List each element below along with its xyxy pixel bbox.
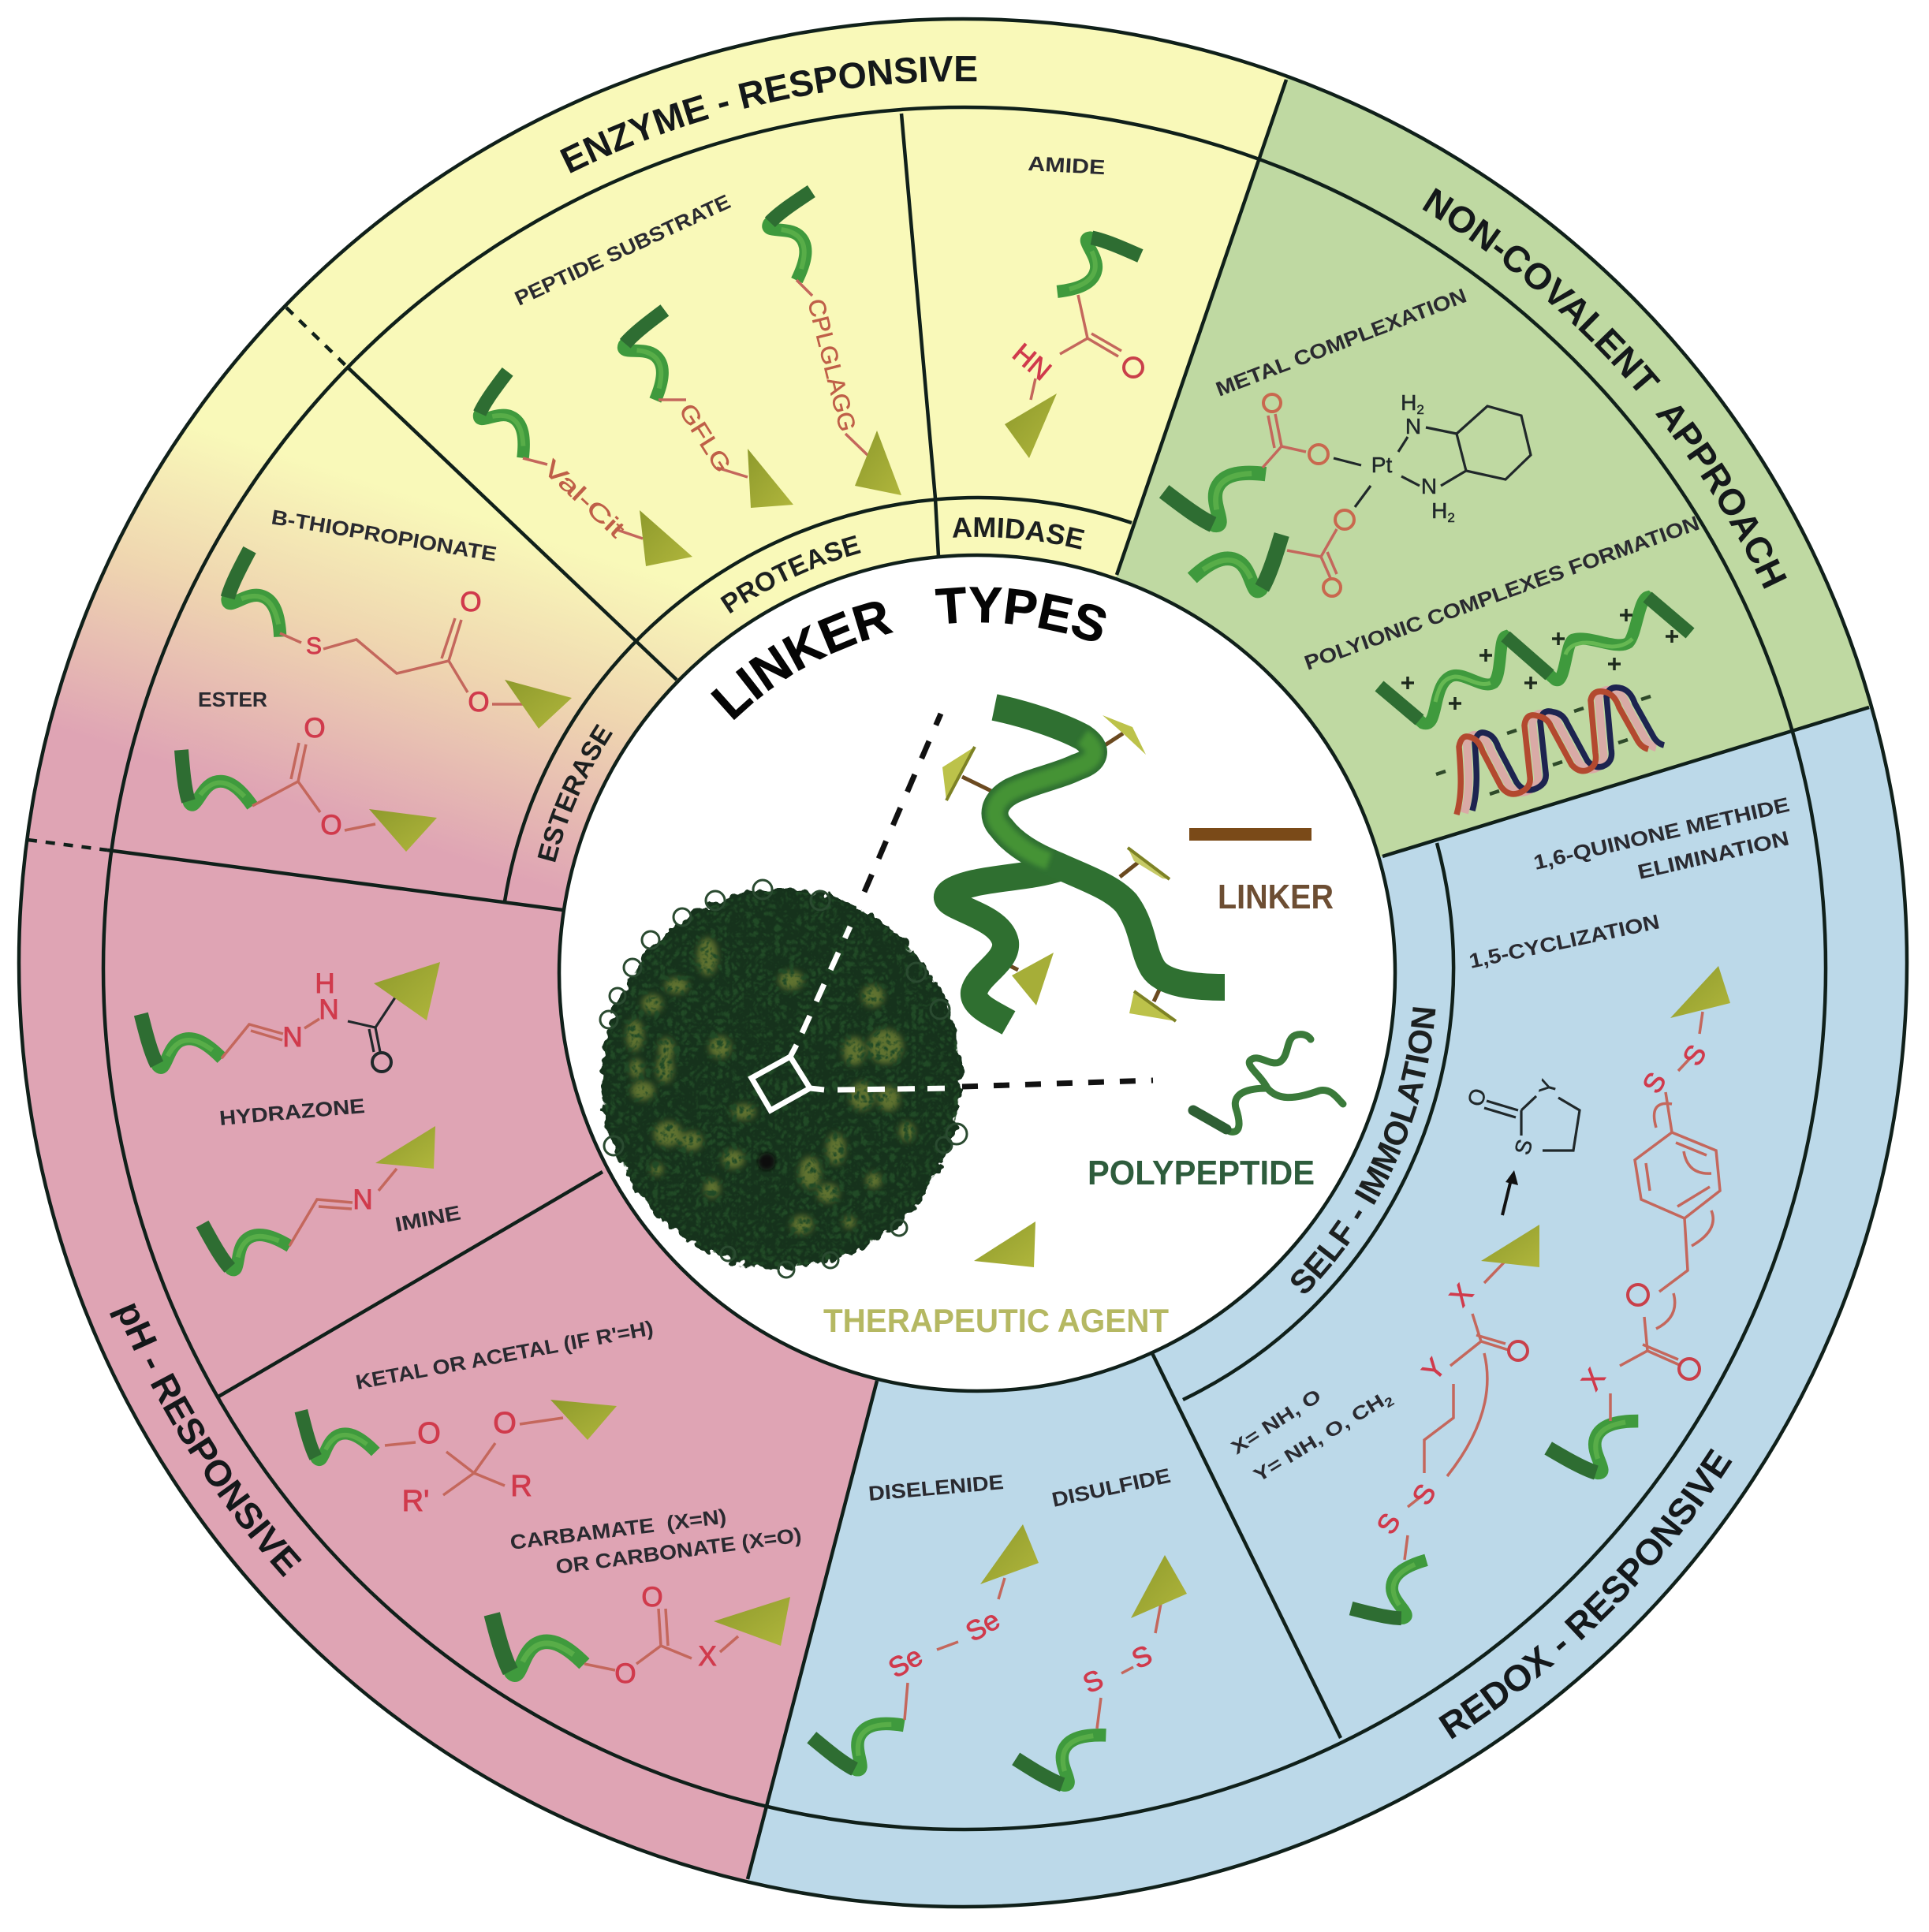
- structure: platinum diaminocyclohexane: [1334, 390, 1531, 525]
- label: carbamate or carbonate: [509, 1505, 803, 1579]
- panel: enzyme-responsive to pH-responsive background: [0, 0, 1313, 1932]
- icon: polymer chain: [1548, 1388, 1638, 1482]
- structure: disulfide: S: [1078, 1664, 1108, 1699]
- label: 1,5-cyclization: 1,5-CYCLIZATION: [1467, 909, 1662, 973]
- icon: therapeutic agent triangle: [980, 1524, 1039, 1584]
- icon: polymer chain val-cit: [472, 371, 559, 458]
- title: linker types: [711, 587, 1106, 721]
- structure: 1,6-elimination: S: [1636, 1067, 1673, 1098]
- icon: polymer chain: [141, 1002, 222, 1070]
- icon: DNA helix: [1457, 688, 1664, 815]
- structure: diselenide: Se: [961, 1604, 1006, 1648]
- panel: nanoparticle: [600, 714, 1153, 1277]
- label: X and Y definitions: 2: [1382, 1395, 1397, 1411]
- structure: ester: [252, 713, 375, 841]
- structure: ester: O: [304, 713, 326, 744]
- structure: disulfide: S: [1127, 1639, 1157, 1675]
- arrow: release: [1502, 1170, 1518, 1215]
- nanoparticle drug patches: [626, 938, 915, 1234]
- label: peptide substrate: PEPTIDE SUBSTRATE: [511, 189, 734, 310]
- icon: therapeutic agent triangle: [855, 431, 901, 495]
- panel: non-covalent approach background: [1116, 78, 1870, 856]
- icon: polymer chain 2: [1192, 518, 1282, 595]
- panel: centre white circle: [559, 555, 1395, 1391]
- structure: ketal: R': [402, 1485, 429, 1518]
- structure: gflg linker: GFLG: [673, 399, 736, 477]
- structure: ketal: [385, 1407, 563, 1518]
- icon: therapeutic agent triangle: [374, 962, 440, 1020]
- structure: platinum diaminocyclohexane: 2: [1416, 402, 1424, 417]
- icon: therapeutic agent triangle: [974, 1221, 1035, 1267]
- structure: cyclic thiolactone: [1463, 1076, 1580, 1158]
- heading: pH-responsive: pH - RESPONSIVE: [110, 1303, 302, 1577]
- panel: hydrazone and imine: [141, 962, 463, 1275]
- structure: platinum diaminocyclohexane: H: [1401, 390, 1416, 415]
- icon: therapeutic agent triangle: [505, 680, 572, 729]
- label: polyionic complexes formation: POLYIONIC COMPLEXES FORMATION: [1301, 511, 1703, 675]
- structure: diselenide: [883, 1578, 1006, 1720]
- structure: 1,5-cyclization: Y: [1416, 1352, 1452, 1386]
- structure: platinum carboxylate ligands: [1263, 394, 1354, 596]
- icon: therapeutic agent triangle: [640, 510, 692, 566]
- icon: polymer chain: [1058, 229, 1140, 319]
- label: therapeutic agent: THERAPEUTIC AGENT: [823, 1302, 1169, 1339]
- structure: carbamate: X: [698, 1641, 717, 1672]
- structure: diselenide: Se: [883, 1640, 928, 1684]
- structure: 1,6-elimination: [1576, 1012, 1720, 1421]
- structure: platinum diaminocyclohexane: N: [1421, 474, 1437, 498]
- label: ketal or acetal: KETAL OR ACETAL (IF R'=H): [354, 1316, 655, 1394]
- structure: ketal: O: [493, 1407, 517, 1440]
- structure: thiopropionate: S: [306, 633, 322, 659]
- title: linker types: LINKER: [711, 602, 894, 721]
- heading: non-covalent approach: NON-COVALENT APPROACH: [1423, 188, 1787, 589]
- structure: thiopropionate: O: [460, 587, 482, 617]
- icon: therapeutic agent triangle: [714, 1597, 790, 1646]
- label: polypeptide: POLYPEPTIDE: [1088, 1154, 1315, 1192]
- polypeptide main chain: [994, 707, 1225, 987]
- structure: 1,6-elimination: X: [1576, 1363, 1611, 1396]
- structure: cyclic thiolactone: Y: [1534, 1076, 1561, 1098]
- structure: hydrazone: N: [282, 1022, 303, 1053]
- label: X and Y definitions: Y= NH, O, CH: [1250, 1406, 1363, 1486]
- structure: carbamate: [584, 1582, 738, 1689]
- structure: 1,5-cyclization: S: [1371, 1508, 1407, 1539]
- sub-heading: self-immolation: SELF - IMMOLATION: [1291, 1007, 1435, 1293]
- sub-heading: protease: PROTEASE: [720, 535, 861, 614]
- label: metal complexation: METAL COMPLEXATION: [1212, 283, 1470, 401]
- label: beta-thiopropionate: B-THIOPROPIONATE: [270, 505, 498, 566]
- structure: disulfide: [1078, 1599, 1162, 1729]
- structure: val-cit linker: [523, 455, 643, 543]
- icon: therapeutic agent triangle: [550, 1400, 617, 1440]
- label: diselenide: DISELENIDE: [867, 1470, 1005, 1505]
- icon: polymer chain: [203, 1195, 290, 1275]
- linker sticks: [962, 733, 1160, 1001]
- structure: cplglagg linker: [797, 280, 867, 455]
- heading: redox-responsive: REDOX - RESPONSIVE: [1438, 1448, 1732, 1740]
- icon: polymer chain: [1016, 1700, 1106, 1793]
- sub-heading: amidase: AMIDASE: [953, 517, 1085, 550]
- label: 1,6-quinone methide elimination: 1,6-QUINONE METHIDE: [1532, 793, 1792, 875]
- polypeptide highlight: [994, 737, 1094, 861]
- label: X and Y definitions: [1228, 1386, 1397, 1489]
- icon: polymer chain: [219, 550, 311, 636]
- icon: therapeutic agent triangle: [1131, 1555, 1187, 1618]
- icon: positive charges: [1401, 609, 1678, 710]
- icon: therapeutic agent triangle: [375, 1126, 435, 1169]
- structure: thiopropionate: O: [468, 687, 490, 718]
- structure: platinum diaminocyclohexane: H: [1431, 498, 1447, 523]
- icon: polymer chain: [492, 1600, 584, 1678]
- icon: therapeutic agent triangle: [1481, 1225, 1539, 1267]
- magnified square marker: [752, 1057, 810, 1110]
- sub-heading: esterase: ESTERASE: [538, 724, 613, 863]
- structure: amide bond: HN: [1006, 338, 1057, 386]
- panel: amide: [1005, 151, 1143, 458]
- icon: therapeutic agent triangle: [1670, 966, 1730, 1018]
- label: carbamate or carbonate: CARBAMATE (X=N): [509, 1505, 728, 1554]
- nanoparticle edge loops: [600, 880, 967, 1277]
- panel: redox-responsive background: [734, 689, 1929, 1932]
- icon: polymer chain: [181, 750, 252, 806]
- structure: 1,5-cyclization: [1371, 1261, 1528, 1560]
- panel: esterase structures: [181, 505, 572, 852]
- icon: therapeutic agent triangle: [1005, 393, 1057, 458]
- structure: cyclic thiolactone: O: [1463, 1086, 1491, 1109]
- structure: ketal: R: [510, 1470, 532, 1503]
- structure: 1,6-elimination: S: [1677, 1039, 1713, 1071]
- structure: platinum diaminocyclohexane: N: [1405, 414, 1421, 438]
- structure: carbamate: O: [641, 1582, 663, 1613]
- icon: polymer chain: [812, 1685, 904, 1777]
- structure: platinum diaminocyclohexane: 2: [1447, 510, 1455, 525]
- nanoparticle strand texture: [603, 891, 960, 1266]
- structure: cyclic thiolactone: S: [1509, 1137, 1537, 1158]
- zoom line to polypeptide: [810, 1080, 1153, 1090]
- structure: hydrazone: [222, 968, 400, 1072]
- structure: ester: O: [320, 810, 342, 841]
- structure: 1,5-cyclization: X: [1444, 1278, 1479, 1312]
- icon: large polypeptide with linkers and agents: [942, 707, 1225, 1023]
- polypeptide branch: [947, 867, 1061, 1023]
- icon: therapeutic agent triangle: [369, 809, 437, 852]
- structure: gflg linker: [659, 399, 748, 477]
- panel: self-immolation structures: [1228, 793, 1792, 1627]
- panel: centre legend: [823, 707, 1343, 1339]
- structure: carbamate: O: [614, 1658, 636, 1689]
- structure: imine: N: [353, 1184, 373, 1215]
- structure: thiopropionate: [280, 587, 523, 718]
- panel: peptide substrate: [472, 189, 901, 566]
- structure: ketal: O: [417, 1417, 441, 1450]
- icon: linker bar: [1189, 828, 1311, 841]
- icon: polymer chain cplglagg: [763, 192, 846, 281]
- structure: amide bond: [1006, 295, 1143, 400]
- label: 1,6-quinone methide elimination: ELIMINATION: [1636, 826, 1791, 884]
- nanoparticle dark core spot: [758, 1153, 775, 1170]
- structure: hydrazone: H: [315, 968, 335, 999]
- structure: platinum diaminocyclohexane: Pt: [1371, 453, 1392, 477]
- icon: polymer chain: [1351, 1542, 1427, 1627]
- label: imine: IMINE: [393, 1200, 463, 1236]
- label: amide: AMIDE: [1028, 151, 1106, 179]
- label: ester: ESTER: [198, 688, 267, 711]
- structure: cplglagg linker: CPLGLAGG: [802, 297, 860, 435]
- icon: small polypeptide: [1193, 1035, 1343, 1132]
- agent heads: [942, 715, 1176, 1021]
- label: carbamate or carbonate: OR CARBONATE (X=O): [554, 1523, 803, 1579]
- nanoparticle body: [602, 890, 961, 1268]
- panel: diselenide and disulfide: [812, 1464, 1187, 1793]
- structure: imine: [289, 1169, 397, 1246]
- structure: hydrazone: N: [319, 994, 339, 1025]
- icon: polymer chain: [301, 1400, 375, 1463]
- icon: polycation chain: [1379, 597, 1690, 724]
- icon: therapeutic agent triangle: [748, 449, 793, 508]
- icon: polymer chain 1: [1164, 431, 1266, 534]
- heading: enzyme-responsive: ENZYME - RESPONSIVE: [560, 56, 976, 173]
- panel: ketal and carbamate: [301, 1316, 803, 1689]
- label: linker: LINKER: [1218, 878, 1334, 916]
- label: X and Y definitions: X= NH, O: [1228, 1386, 1325, 1459]
- zoom line to polymer: [790, 714, 941, 1057]
- icon: negative charges: [1436, 696, 1651, 794]
- label: disulfide: DISULFIDE: [1050, 1464, 1173, 1512]
- label: hydrazone: HYDRAZONE: [218, 1094, 366, 1130]
- icon: polymer chain gflg: [618, 310, 703, 400]
- title: linker types: TYPES: [935, 587, 1106, 641]
- structure: val-cit linker: Val-Cit: [538, 455, 630, 543]
- structure: 1,5-cyclization: S: [1406, 1479, 1442, 1510]
- panel: non-covalent structures: [1164, 283, 1703, 815]
